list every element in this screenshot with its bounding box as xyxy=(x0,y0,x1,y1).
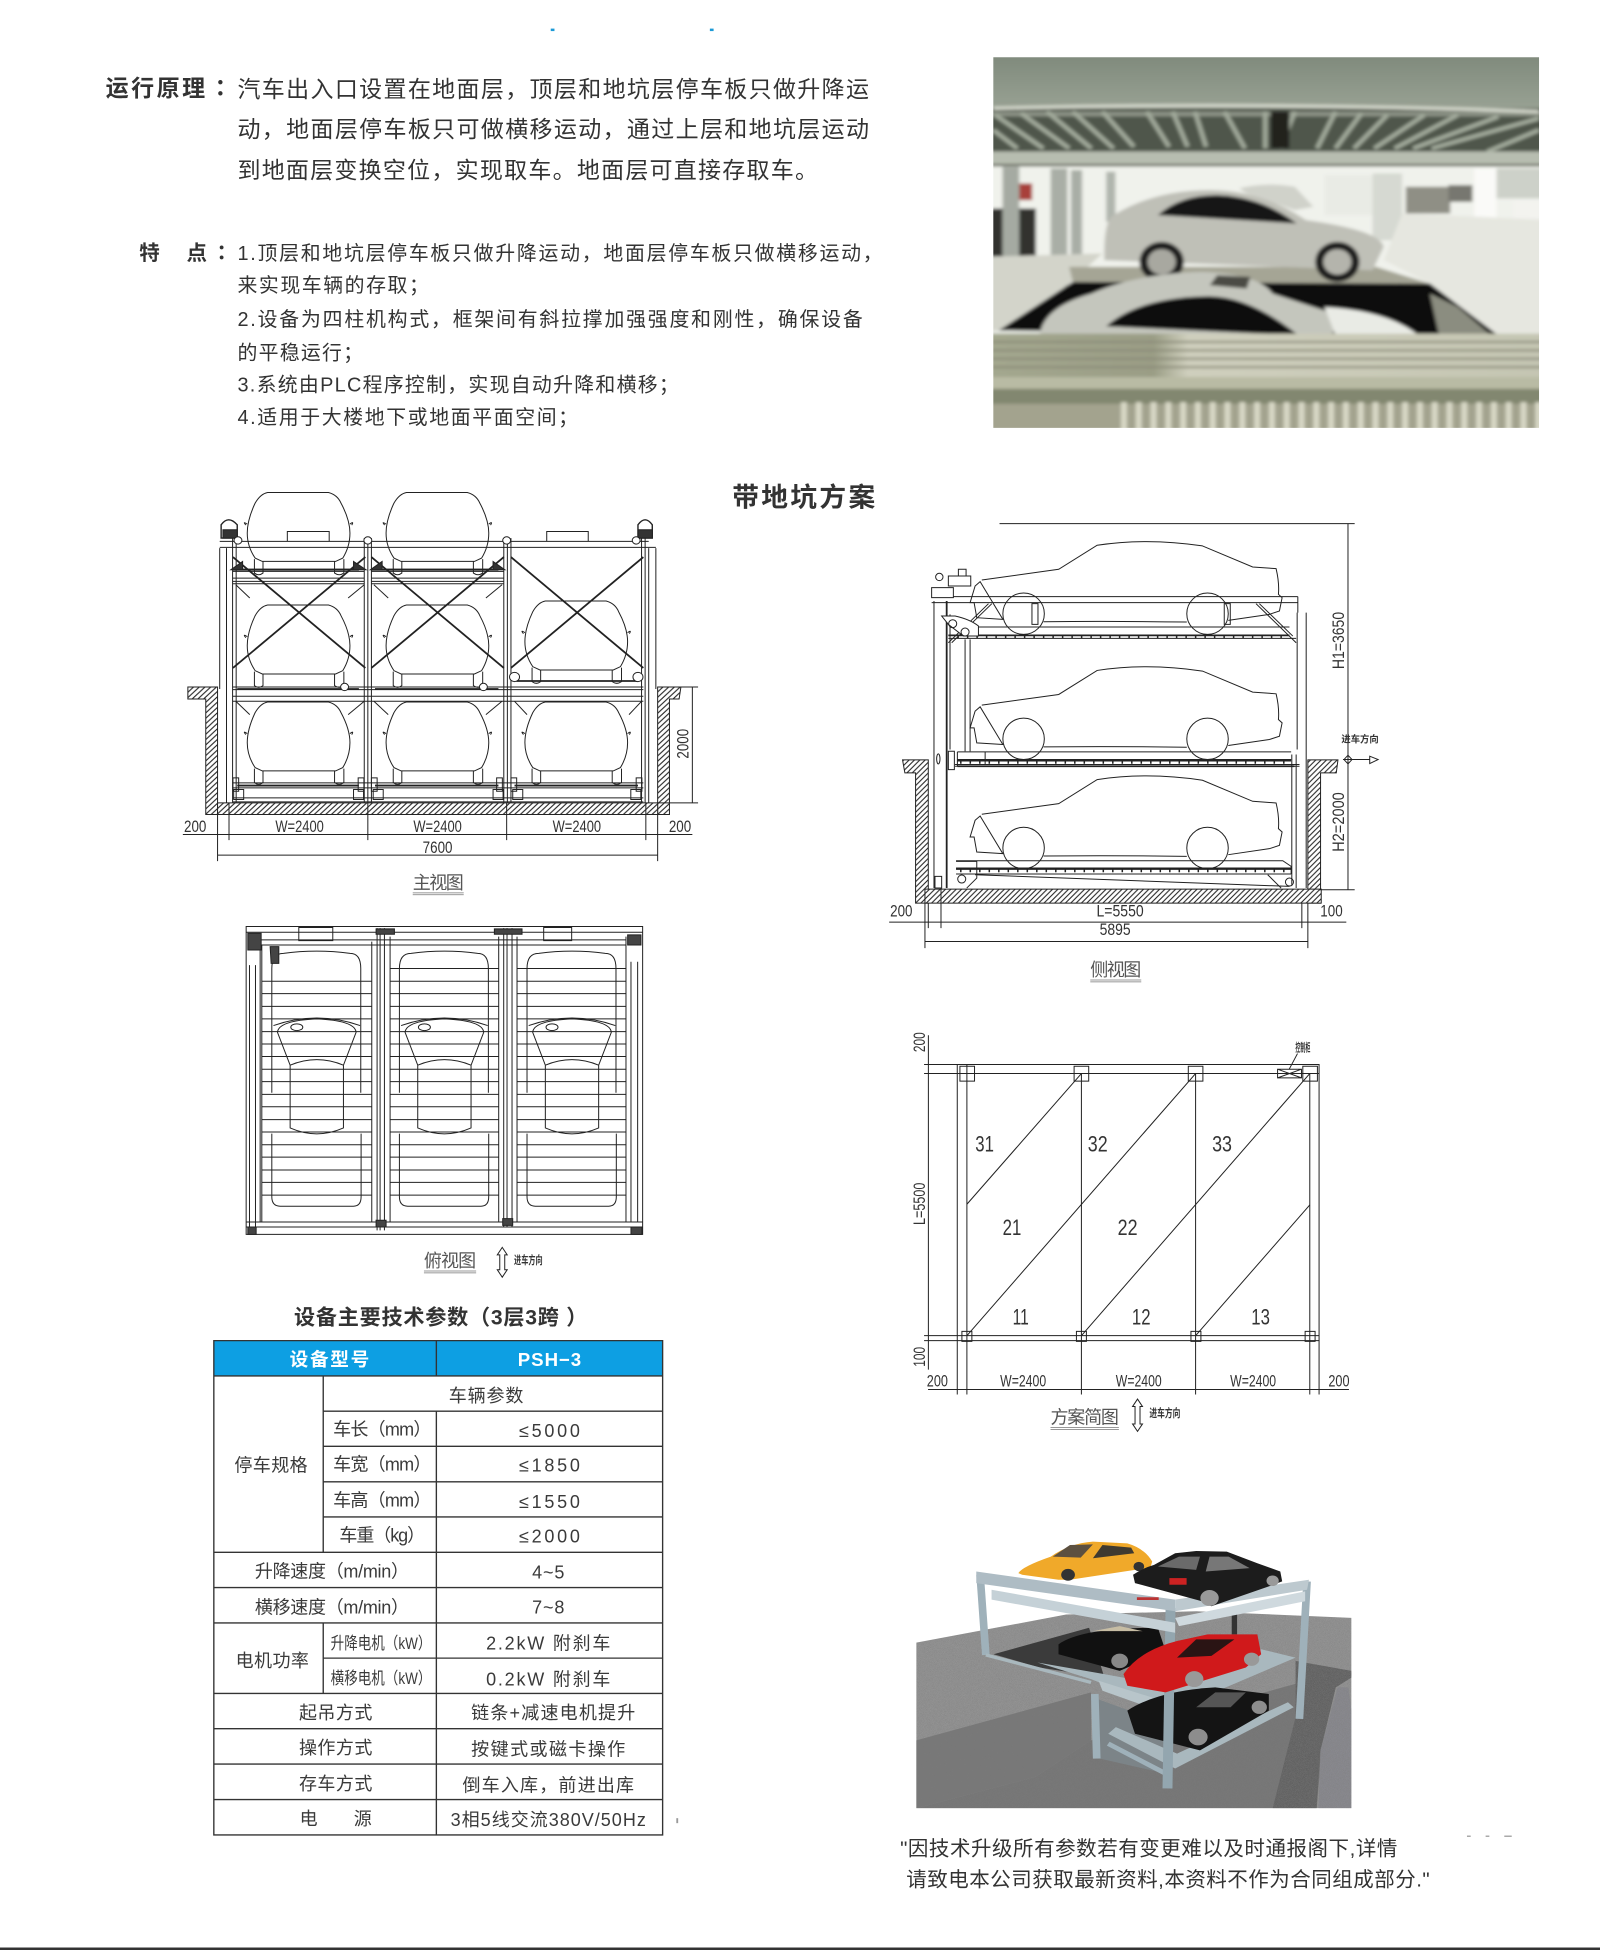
table rows: 停车规格 xyxy=(234,1456,308,1476)
top cars xyxy=(1018,1542,1152,1580)
table rows: 链条+减速电机提升 xyxy=(471,1703,635,1723)
dimension labels: W=2400 xyxy=(413,818,462,836)
drawing: top view xyxy=(246,926,643,1234)
pit walls and floor xyxy=(903,760,1338,903)
disclaimer note xyxy=(900,1837,1430,1892)
cars front outline xyxy=(244,492,630,784)
text block: operating principle: 到地面层变换空位，实现取车。地面层可直接存取车。 xyxy=(237,157,818,183)
table rows: 车重（kg） xyxy=(339,1525,425,1545)
plan labels: 200 xyxy=(1328,1373,1349,1391)
plan labels: 100 xyxy=(911,1347,929,1367)
table rows: 操作方式 xyxy=(299,1738,372,1758)
text block: features xyxy=(139,242,883,429)
plan labels: W=2400 xyxy=(1230,1373,1276,1391)
grid and columns xyxy=(924,1065,1319,1395)
dimension labels: 7600 xyxy=(423,839,453,857)
table rows: 电 源 xyxy=(300,1809,372,1829)
drawing: side view xyxy=(889,524,1379,948)
dimension labels: 2000 xyxy=(675,729,693,759)
text block: features: 1.顶层和地坑层停车板只做升降运动，地面层停车板只做横移运动， xyxy=(237,243,883,265)
table header: PSH−3 xyxy=(518,1349,581,1370)
plan labels: 13 xyxy=(1251,1304,1270,1329)
table grid xyxy=(214,1341,663,1835)
caption: front view: 主视图 xyxy=(413,873,464,893)
table rows: 起吊方式 xyxy=(299,1703,372,1723)
photo: parking equipment with pit xyxy=(993,57,1540,428)
table rows: 车长（mm） xyxy=(333,1420,431,1440)
table rows: 车辆参数 xyxy=(449,1386,523,1406)
dimension labels: H2=2000 xyxy=(1330,792,1348,852)
lower and middle cars xyxy=(1058,1628,1166,1671)
caption: scheme plan with entry direction: 进车方向 xyxy=(1149,1406,1180,1420)
dimension labels: 200 xyxy=(184,818,206,836)
caption: top view with entry direction xyxy=(424,1247,543,1277)
table rows: 0.2kW 附刹车 xyxy=(486,1670,610,1690)
disclaimer note: "因技术升级所有参数若有变更难以及时通报阁下,详情 xyxy=(900,1837,1397,1860)
frame and platforms xyxy=(932,597,1306,888)
table title: 设备主要技术参数（3层3跨 ） xyxy=(294,1305,587,1330)
steel frame xyxy=(220,523,656,803)
dimension labels: H1=3650 xyxy=(1330,612,1348,669)
cars side outline xyxy=(970,542,1282,869)
table header xyxy=(214,1341,663,1376)
blue tick marks at top xyxy=(551,29,714,31)
table rows: 横移速度（m/min） xyxy=(255,1598,409,1618)
parameter table xyxy=(214,1341,663,1835)
plan labels: 控制柜 xyxy=(1295,1040,1310,1054)
dimension labels: 200 xyxy=(669,818,691,836)
table rows: 2.2kW 附刹车 xyxy=(486,1634,610,1654)
dimension lines xyxy=(183,687,698,861)
plan labels: 22 xyxy=(1118,1215,1138,1240)
pit walls and floor with hatching xyxy=(188,687,681,815)
diagonal stall dividers xyxy=(967,1074,1310,1336)
caption: top view with entry direction: 进车方向 xyxy=(514,1253,543,1267)
dimension lines xyxy=(889,524,1378,948)
drawing: front view xyxy=(183,492,698,861)
plan labels: W=2400 xyxy=(1000,1373,1046,1391)
drawing: scheme plan xyxy=(911,1032,1349,1395)
text block: features: ： xyxy=(211,242,232,265)
car plan outlines xyxy=(272,951,616,1206)
plan labels: 12 xyxy=(1132,1304,1151,1329)
disclaimer note: 请致电本公司获取最新资料,本资料不作为合同组成部分." xyxy=(906,1869,1430,1892)
dimension labels: W=2400 xyxy=(275,818,324,836)
text block: features: 3.系统由PLC程序控制，实现自动升降和横移； xyxy=(237,375,679,397)
table rows: 3相5线交流380V/50Hz xyxy=(451,1810,646,1830)
platform slat ticks xyxy=(957,637,1288,871)
frame xyxy=(246,926,643,1234)
table rows: 倒车入库，前进出库 xyxy=(462,1775,634,1795)
dimension labels: W=2400 xyxy=(553,818,601,836)
front column xyxy=(1167,1608,1171,1788)
text block: operating principle: 运行原理 xyxy=(106,75,205,101)
plan labels: 31 xyxy=(975,1132,994,1157)
control unit xyxy=(1278,1054,1301,1078)
table rows: 电机功率 xyxy=(236,1651,309,1671)
text block: features: 点 xyxy=(186,242,207,265)
red car xyxy=(1124,1634,1261,1692)
asphalt ground and pit xyxy=(916,1611,1351,1808)
plan labels xyxy=(911,1032,1349,1391)
table rows: 车高（mm） xyxy=(333,1491,431,1511)
dimension labels: 100 xyxy=(1320,903,1343,921)
text block: features: 4.适用于大楼地下或地面平面空间； xyxy=(237,407,578,429)
dimension labels: 进车方向 xyxy=(1341,732,1379,745)
dimension labels: 200 xyxy=(890,903,913,921)
table rows: ≤5000 xyxy=(519,1421,580,1441)
text block: features: 来实现车辆的存取； xyxy=(237,275,429,297)
frame back columns and platforms xyxy=(980,1575,1307,1759)
top deck beams xyxy=(992,1590,1175,1633)
table rows: ≤1850 xyxy=(519,1456,580,1476)
motor and chain wheel xyxy=(932,569,978,636)
plan labels: L=5500 xyxy=(911,1183,929,1225)
caption: scheme plan with entry direction: 方案简图 xyxy=(1051,1408,1119,1428)
dimension labels: L=5550 xyxy=(1097,903,1144,921)
plan labels: 11 xyxy=(1013,1304,1029,1329)
table rows: 存车方式 xyxy=(299,1774,372,1794)
table rows: 升降电机（kW） xyxy=(331,1634,431,1653)
table rows: 车宽（mm） xyxy=(333,1454,431,1474)
table rows: 按键式或磁卡操作 xyxy=(471,1739,625,1759)
dimension labels xyxy=(890,612,1379,939)
plan labels: W=2400 xyxy=(1116,1373,1162,1391)
dimension labels: 5895 xyxy=(1100,921,1131,939)
table rows: 4~5 xyxy=(532,1563,564,1583)
text block: operating principle: 汽车出入口设置在地面层，顶层和地坑层停车板只做升降运 xyxy=(237,76,869,102)
rendered image: 3-level parking structure xyxy=(916,1542,1351,1808)
heading: with pit scheme: 带地坑方案 xyxy=(732,481,875,512)
table rows: ≤2000 xyxy=(519,1527,580,1547)
plan labels: 32 xyxy=(1088,1132,1108,1157)
caption: scheme plan with entry direction xyxy=(1051,1399,1180,1431)
caption: side view: 侧视图 xyxy=(1090,960,1141,980)
caption: top view with entry direction: 俯视图 xyxy=(424,1251,476,1271)
bottom rule xyxy=(0,1948,1600,1950)
dimension labels xyxy=(184,729,693,857)
stray specks xyxy=(676,1818,1512,1837)
dimension lines xyxy=(928,1035,1349,1390)
table rows xyxy=(234,1386,646,1830)
plan labels: 33 xyxy=(1212,1132,1232,1157)
table rows: ≤1550 xyxy=(519,1492,580,1512)
text block: operating principle: ： xyxy=(209,75,232,101)
text block: operating principle: 动，地面层停车板只可做横移运动，通过上层和地坑层运动 xyxy=(237,116,869,142)
table rows: 7~8 xyxy=(532,1598,564,1618)
plan labels: 21 xyxy=(1003,1215,1021,1240)
text block: features: 2.设备为四柱机构式，框架间有斜拉撑加强强度和刚性，确保设备 xyxy=(237,309,863,331)
text block: features: 特 xyxy=(139,242,160,265)
table header: 设备型号 xyxy=(290,1349,369,1370)
table rows: 升降速度（m/min） xyxy=(255,1561,409,1581)
text block: operating principle xyxy=(106,75,869,183)
plan labels: 200 xyxy=(927,1373,948,1391)
text block: features: 的平稳运行； xyxy=(237,342,363,364)
table rows: 横移电机（kW） xyxy=(331,1669,431,1688)
platform slats xyxy=(262,968,626,1195)
plan labels: 200 xyxy=(911,1032,929,1052)
